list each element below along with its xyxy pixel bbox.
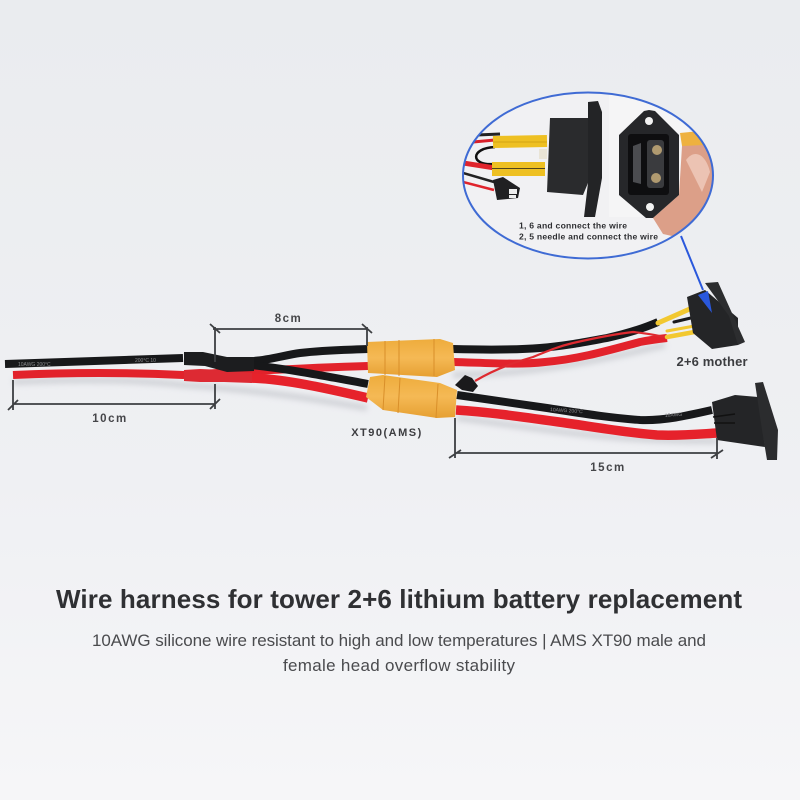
inset: small plug [493,177,520,200]
subtitle: 10AWG silicone wire resistant to high and low temperatures | AMS XT90 male and [92,631,706,650]
title: Wire harness for tower 2+6 lithium battery replacement [56,584,742,614]
label: 2+6 mother: 2+6 mother [676,354,748,369]
inset: finger [653,145,712,236]
dimension: 15cm [449,418,723,474]
inset: connector flange [584,101,602,217]
small JST plug [455,375,478,392]
2+6 mother connector [658,282,745,349]
arrow: callout to connector [681,236,712,313]
dimension: 15cm: 15cm [590,462,626,474]
XT90 connector upper [367,339,455,377]
signal wire red and black [475,332,665,381]
XT90 connector lower [366,375,457,418]
wire printed markings: 10AWG [665,412,683,419]
wire harness infographic [4,92,778,674]
inset caption: 1, 6 and connect the wire [519,220,627,230]
wire printed markings: 200°C 10 [135,358,156,364]
dimension: 8cm: 8cm [275,313,302,325]
inset: pin [539,149,547,159]
dimension: 10cm: 10cm [92,413,128,425]
wire shadows [13,345,717,441]
wire: upper red to mother connector [13,338,667,375]
wire: lower black to bottom connector [250,365,712,420]
inset: connector front [619,110,679,218]
wire printed markings: 10AWG 200°C [550,407,583,415]
inset caption: 2, 5 needle and connect the wire [519,232,658,242]
subtitle: female head overflow stability [283,656,516,675]
wire printed markings [18,358,683,419]
callout: zoomed connector view [463,90,720,258]
wire printed markings: 10AWG 200°C [18,362,51,368]
inset caption [519,220,658,242]
inset: white photo panel [609,90,689,217]
inset: wires [463,134,547,190]
heat shrink sleeves [184,352,254,383]
inset: connector side body [547,118,588,195]
subtitle [92,631,706,675]
wire: lower red to bottom connector [250,378,717,435]
wire: upper black to mother connector [5,322,658,364]
dimension: 8cm [210,313,372,362]
bottom connector [712,382,778,460]
label: XT90(AMS): XT90(AMS) [351,427,423,439]
dimension: 10cm [8,380,220,425]
